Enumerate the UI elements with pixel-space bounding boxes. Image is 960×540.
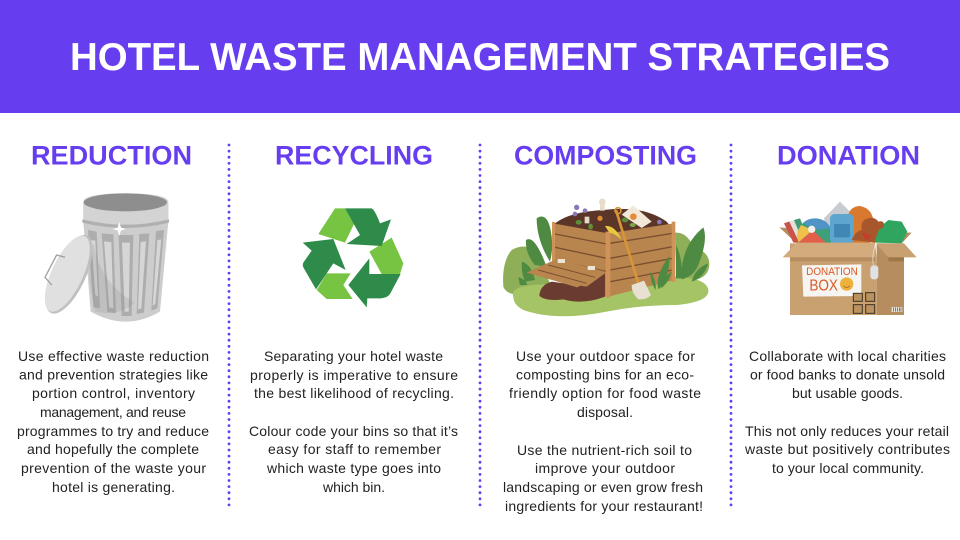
header band bbox=[0, 0, 960, 113]
icon: recycling arrows bbox=[303, 208, 403, 307]
lid bbox=[36, 229, 102, 320]
text: composting bbox=[503, 348, 703, 514]
icon: donation box: DONATION bbox=[806, 266, 858, 278]
text: donation: waste but positively contributes bbox=[744, 441, 950, 457]
title: HOTEL WASTE MANAGEMENT STRATEGIES bbox=[70, 36, 890, 79]
text: reduction: portion control, inventory bbox=[32, 385, 195, 401]
icon: compost bin bbox=[503, 199, 709, 316]
text: reduction: and prevention strategies like bbox=[19, 366, 208, 382]
text: reduction: programmes to try and reduce bbox=[17, 423, 209, 439]
text: donation: or food banks to donate unsold bbox=[750, 366, 945, 382]
beach ball bbox=[797, 218, 832, 243]
panel: recycling bbox=[249, 140, 458, 495]
panel: composting bbox=[503, 140, 709, 514]
text: recycling: Separating your hotel waste bbox=[264, 348, 443, 364]
heading: reduction: REDUCTION bbox=[31, 140, 192, 170]
text: donation: Collaborate with local charities bbox=[749, 348, 946, 364]
text: composting: disposal. bbox=[577, 404, 633, 420]
text: recycling bbox=[249, 348, 458, 495]
panel: donation bbox=[744, 140, 950, 476]
icon: trash can bbox=[36, 193, 169, 322]
text: composting: ingredients for your restaurant! bbox=[505, 498, 703, 514]
icon: donation box bbox=[779, 202, 917, 315]
text: recycling: which bin. bbox=[322, 479, 385, 495]
text: composting: composting bins for an eco- bbox=[516, 366, 694, 382]
text: reduction: hotel is generating. bbox=[52, 479, 175, 495]
panel: reduction bbox=[17, 140, 209, 495]
heading: recycling: RECYCLING bbox=[275, 140, 433, 170]
text: recycling: properly is imperative to ensure bbox=[250, 367, 458, 383]
text: recycling: Colour code your bins so that it’s bbox=[249, 423, 458, 439]
text: composting: Use your outdoor space for bbox=[516, 348, 695, 364]
text: reduction: prevention of the waste your bbox=[21, 460, 206, 476]
heading: donation: DONATION bbox=[777, 140, 920, 170]
text: donation: but usable goods. bbox=[792, 385, 903, 401]
text: donation: This not only reduces your retail bbox=[745, 423, 949, 439]
heading: composting: COMPOSTING bbox=[514, 140, 697, 170]
text: donation: to your local community. bbox=[772, 460, 924, 476]
text: recycling: the best likelihood of recycling. bbox=[254, 385, 454, 401]
icon: donation box: BOX bbox=[809, 277, 838, 294]
text: reduction: management, and reuse bbox=[40, 404, 186, 420]
text: composting: Use the nutrient-rich soil to bbox=[517, 442, 692, 458]
text: composting: landscaping or even grow fresh bbox=[503, 479, 703, 495]
text: reduction: Use effective waste reduction bbox=[18, 348, 209, 364]
text: reduction: and hopefully the complete bbox=[27, 441, 199, 457]
text: composting: improve your outdoor bbox=[535, 460, 675, 476]
text: donation bbox=[744, 348, 950, 476]
text: composting: friendly option for food waste bbox=[509, 385, 701, 401]
text: recycling: easy for staff to remember bbox=[268, 441, 441, 457]
text: recycling: which waste type goes into bbox=[266, 460, 441, 476]
text: reduction bbox=[17, 348, 209, 495]
